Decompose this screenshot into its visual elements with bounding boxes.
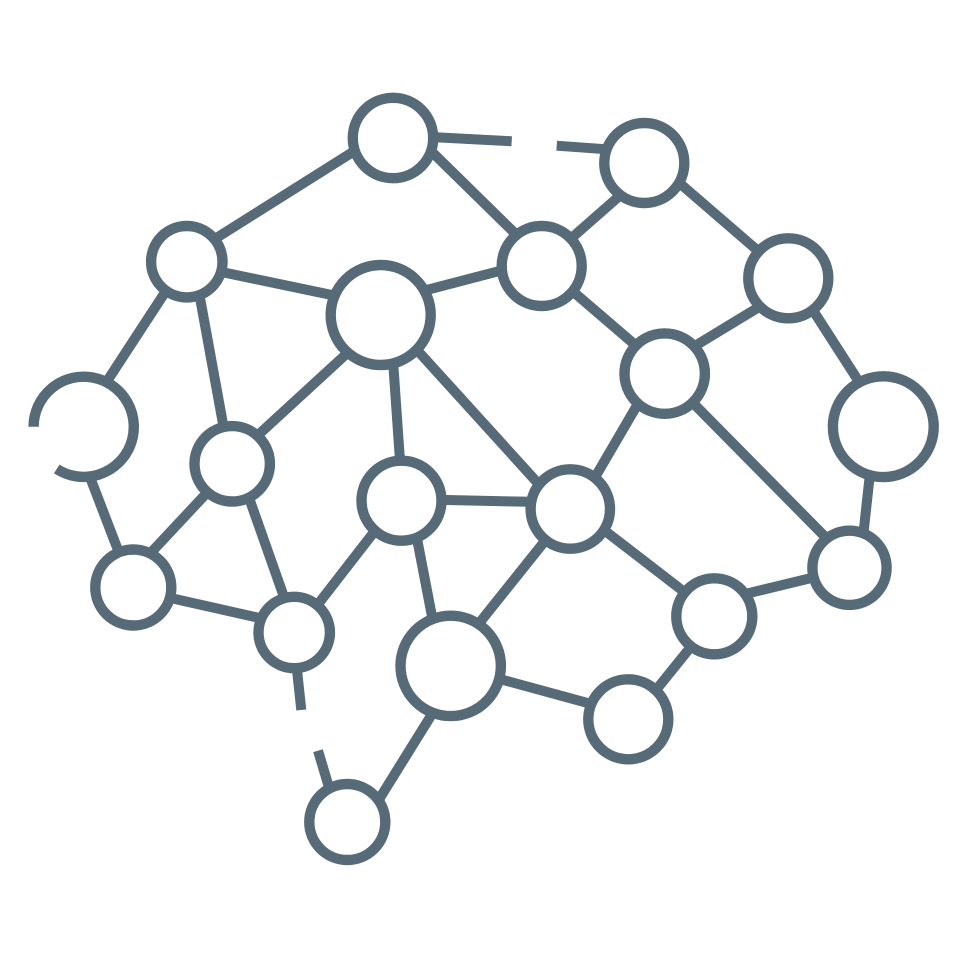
nodes [95,98,934,860]
connecting lines [90,137,870,801]
open node [34,377,134,477]
